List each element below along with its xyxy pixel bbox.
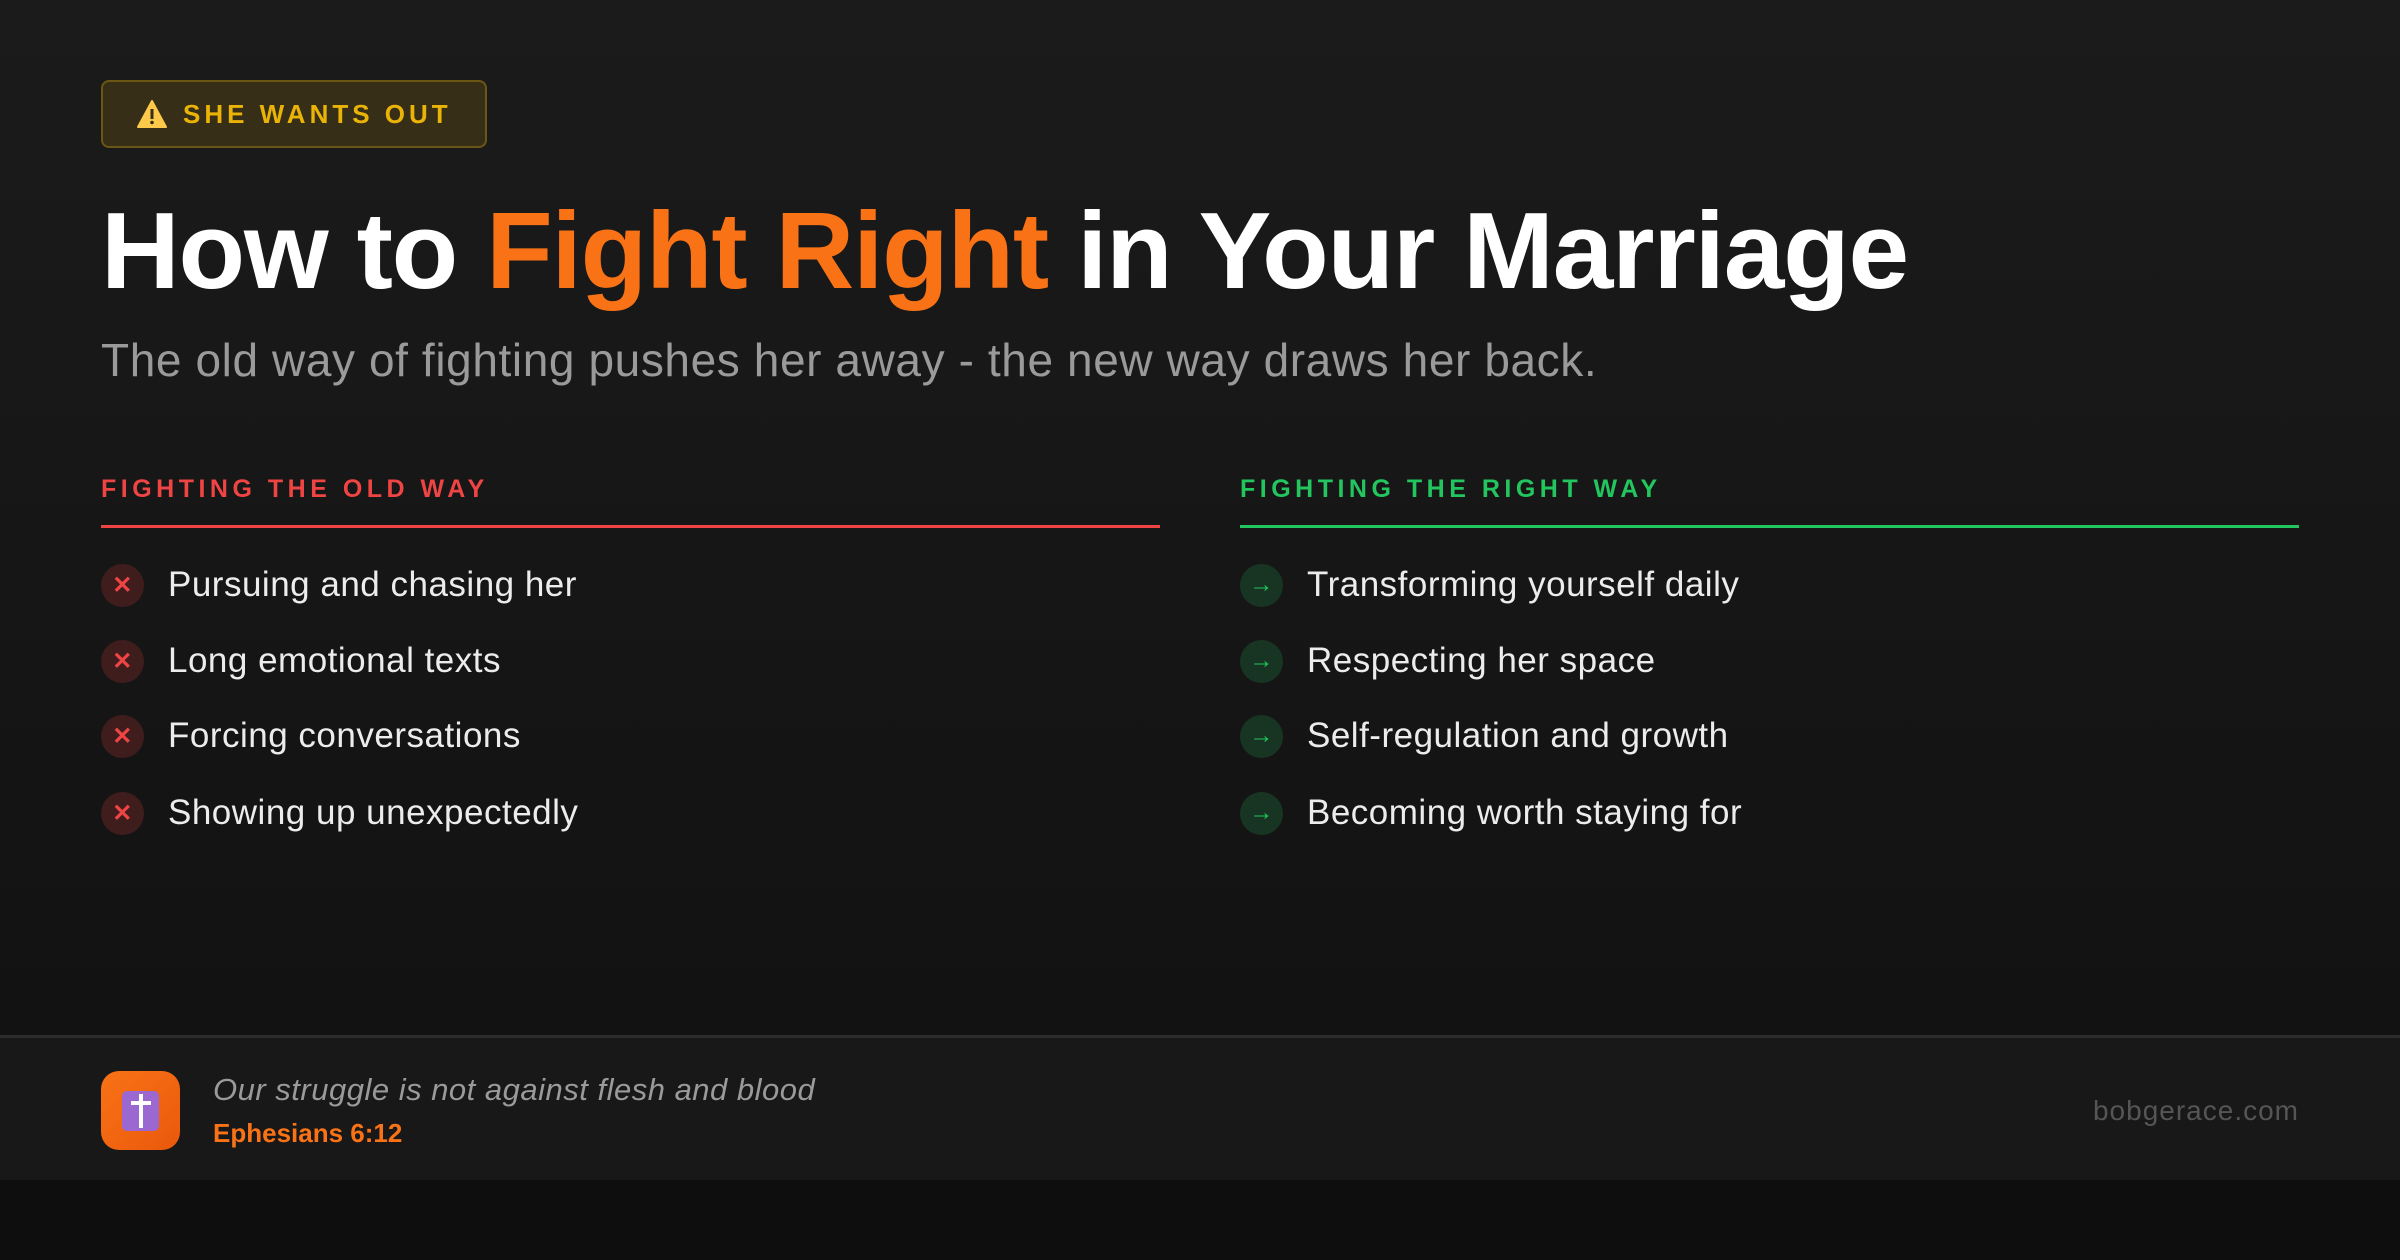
- item 4: ✕: [112, 800, 133, 826]
- item 1: →: [1249, 571, 1274, 598]
- subtitle: The old way of fighting pushes her away - the new way draws her back.: [101, 334, 1597, 386]
- item 4: Becoming worth staying for: [1307, 793, 1742, 832]
- item 2: ✕: [112, 648, 133, 674]
- footer: [0, 1035, 2400, 1180]
- title: How to Fight Right in Your Marriage: [101, 190, 1908, 312]
- item 3: Forcing conversations: [168, 716, 521, 755]
- quote: Our struggle is not against flesh and blood: [213, 1072, 815, 1107]
- badge: she wants out: [101, 80, 487, 148]
- item 1: Transforming yourself daily: [1307, 565, 1739, 604]
- item 2: Long emotional texts: [168, 641, 501, 680]
- item 1: ✕: [112, 572, 133, 598]
- item 2: Respecting her space: [1307, 641, 1656, 680]
- heading: right way: FIGHTING THE RIGHT WAY: [1240, 475, 1662, 503]
- item 4: Showing up unexpectedly: [168, 793, 578, 832]
- panel: old way: [101, 475, 1160, 835]
- site url: bobgerace.com: [2093, 1095, 2299, 1126]
- item 2: →: [1249, 647, 1274, 674]
- item 3: Self-regulation and growth: [1307, 716, 1729, 755]
- reference: Ephesians 6:12: [213, 1118, 402, 1148]
- panel: right way: [1240, 475, 2299, 835]
- item 3: ✕: [112, 722, 133, 750]
- badge: she wants out: SHE WANTS OUT: [183, 98, 452, 128]
- heading: old way: FIGHTING THE OLD WAY: [101, 475, 489, 503]
- item 1: Pursuing and chasing her: [168, 565, 577, 604]
- item 3: →: [1249, 722, 1274, 749]
- item 4: →: [1249, 799, 1274, 826]
- icon: cross: [101, 1071, 180, 1150]
